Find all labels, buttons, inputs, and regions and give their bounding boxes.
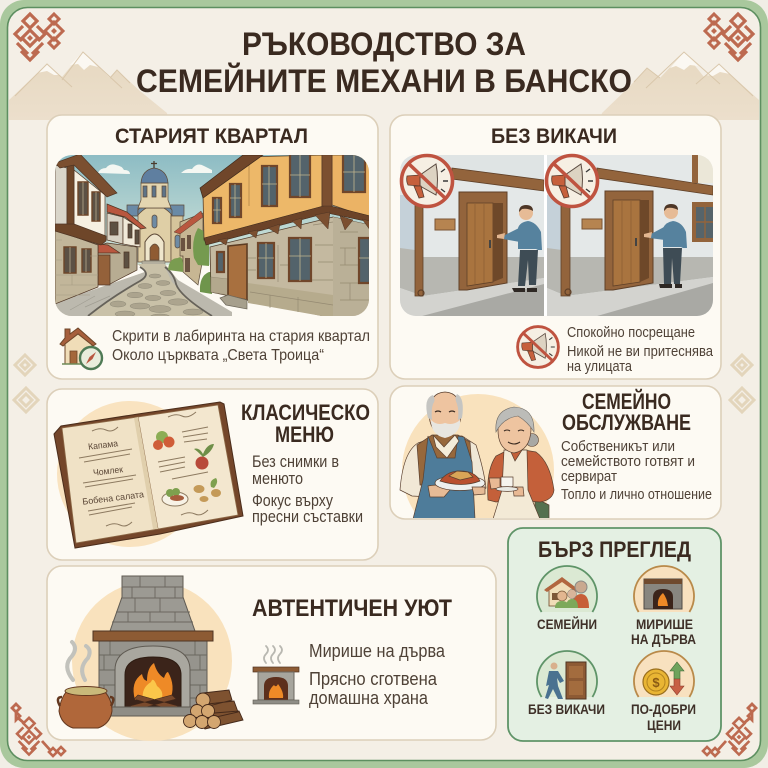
ornament: side left: [14, 355, 38, 412]
label: better prices: ЦЕНИ: [647, 717, 681, 733]
big house windows and door: [213, 154, 370, 283]
heading: family service: ОБСЛУЖВАНЕ: [562, 410, 691, 435]
heading: authentic cosiness: АВТЕНТИЧЕН УЮТ: [252, 595, 452, 622]
man: [644, 204, 687, 288]
steam: [67, 642, 90, 680]
woman: [488, 450, 554, 519]
menu item names: Чомлек: [93, 464, 124, 478]
label: family: СЕМЕЙНИ: [537, 615, 597, 632]
mountains: left: [9, 52, 168, 120]
text: menu notes: менюто: [252, 470, 303, 488]
label: no touts: БЕЗ ВИКАЧИ: [528, 701, 605, 717]
icon: better prices: [634, 651, 694, 697]
text: cosiness notes: Мирише на дърва: [309, 640, 446, 661]
icon: better prices: $: [652, 675, 660, 690]
text: location notes: Скрити в лабиринта на стария квартал: [112, 328, 370, 345]
heading: classic menu: МЕНЮ: [275, 422, 334, 447]
panel: family service: [389, 385, 722, 520]
logs: [184, 690, 243, 729]
label: wood smell: МИРИШЕ: [636, 616, 693, 632]
icon: no megaphone right: [546, 156, 598, 206]
big house orange wall: [203, 155, 322, 240]
text: family notes: сервират: [561, 469, 617, 485]
heading: old quarter: СТАРИЯТ КВАРТАЛ: [115, 125, 308, 148]
heading: classic menu: КЛАСИЧЕСКО: [241, 400, 370, 425]
ornament: bottom right: [703, 704, 756, 756]
text: no touts notes: [567, 324, 714, 375]
heading: family service: СЕМЕЙНО: [582, 389, 671, 414]
label: better prices: ПО-ДОБРИ: [631, 701, 696, 717]
panel: no touts: [390, 115, 721, 379]
text: menu notes: Без снимки в: [252, 453, 339, 471]
heading: no touts: БЕЗ ВИКАЧИ: [491, 125, 617, 148]
left house: [55, 154, 117, 304]
big house stone wall: [210, 217, 370, 318]
ornament: top right: [705, 14, 753, 60]
illustration: old street with church: [55, 154, 370, 320]
text: no touts notes: Спокойно посрещане: [567, 324, 695, 341]
man: [497, 205, 542, 292]
panel: authentic cosiness: [47, 566, 496, 741]
illustration: elderly owners: [400, 392, 554, 518]
menu item names: Бобена салата: [82, 489, 145, 507]
icon: wood smell fireplace: [634, 566, 694, 612]
label: better prices: [631, 701, 696, 733]
illustration: right door scene: [547, 155, 713, 316]
text: cosiness notes: домашна храна: [309, 687, 429, 708]
heading: family service: [562, 389, 691, 435]
text: family notes: [561, 439, 712, 503]
ornament: side right: [730, 355, 754, 412]
text: menu notes: пресни съставки: [252, 508, 363, 526]
text: family notes: семейството готвят и: [561, 454, 695, 470]
man: [400, 435, 486, 519]
icon: small fireplace: [253, 646, 299, 704]
menu item names: [82, 438, 145, 507]
middle-left house: [98, 204, 146, 285]
illustration: left door scene: [400, 155, 544, 316]
icon: small no megaphone: [518, 327, 558, 367]
text: family notes: Топло и лично отношение: [561, 487, 712, 503]
ornament: bottom left: [12, 704, 65, 756]
title: [136, 26, 632, 99]
panel: quick overview: [508, 528, 721, 741]
text: location notes: [112, 328, 370, 364]
text: menu notes: [252, 453, 363, 526]
panel: old quarter: [47, 115, 378, 379]
heading: quick overview: БЪРЗ ПРЕГЛЕД: [538, 537, 691, 562]
mountains: right: [600, 52, 759, 120]
right small house and bushes: [180, 213, 203, 285]
title: РЪКОВОДСТВО ЗА: [242, 26, 526, 62]
text: no touts notes: Никой не ви притеснява: [567, 343, 714, 360]
heading: classic menu: [241, 400, 370, 447]
icon: no megaphone left: [402, 156, 452, 206]
text: location notes: Около църквата „Света Троица“: [112, 347, 324, 364]
label: wood smell: НА ДЪРВА: [631, 631, 696, 647]
title: СЕМЕЙНИТЕ МЕХАНИ В БАНСКО: [136, 63, 632, 99]
icon: house with compass: [60, 328, 102, 369]
text: menu notes: Фокус върху: [252, 492, 334, 510]
text: cosiness notes: Прясно сготвена: [309, 668, 438, 689]
church: [127, 161, 184, 262]
menu item names: Капама: [88, 438, 118, 452]
icon: family: [537, 566, 597, 612]
illustration: stone fireplace: [58, 576, 243, 741]
icon: person at door: [537, 651, 597, 699]
pot: [59, 692, 112, 728]
illustration: open menu book: [54, 401, 243, 548]
label: wood smell: [631, 616, 696, 647]
text: cosiness notes: [309, 640, 446, 708]
panel: classic menu: [47, 389, 378, 560]
street: [56, 264, 210, 316]
text: family notes: Собственикът или: [561, 439, 675, 455]
text: no touts notes: на улицата: [567, 358, 633, 375]
ornament: top left: [15, 14, 63, 60]
vegetables: [153, 431, 221, 506]
